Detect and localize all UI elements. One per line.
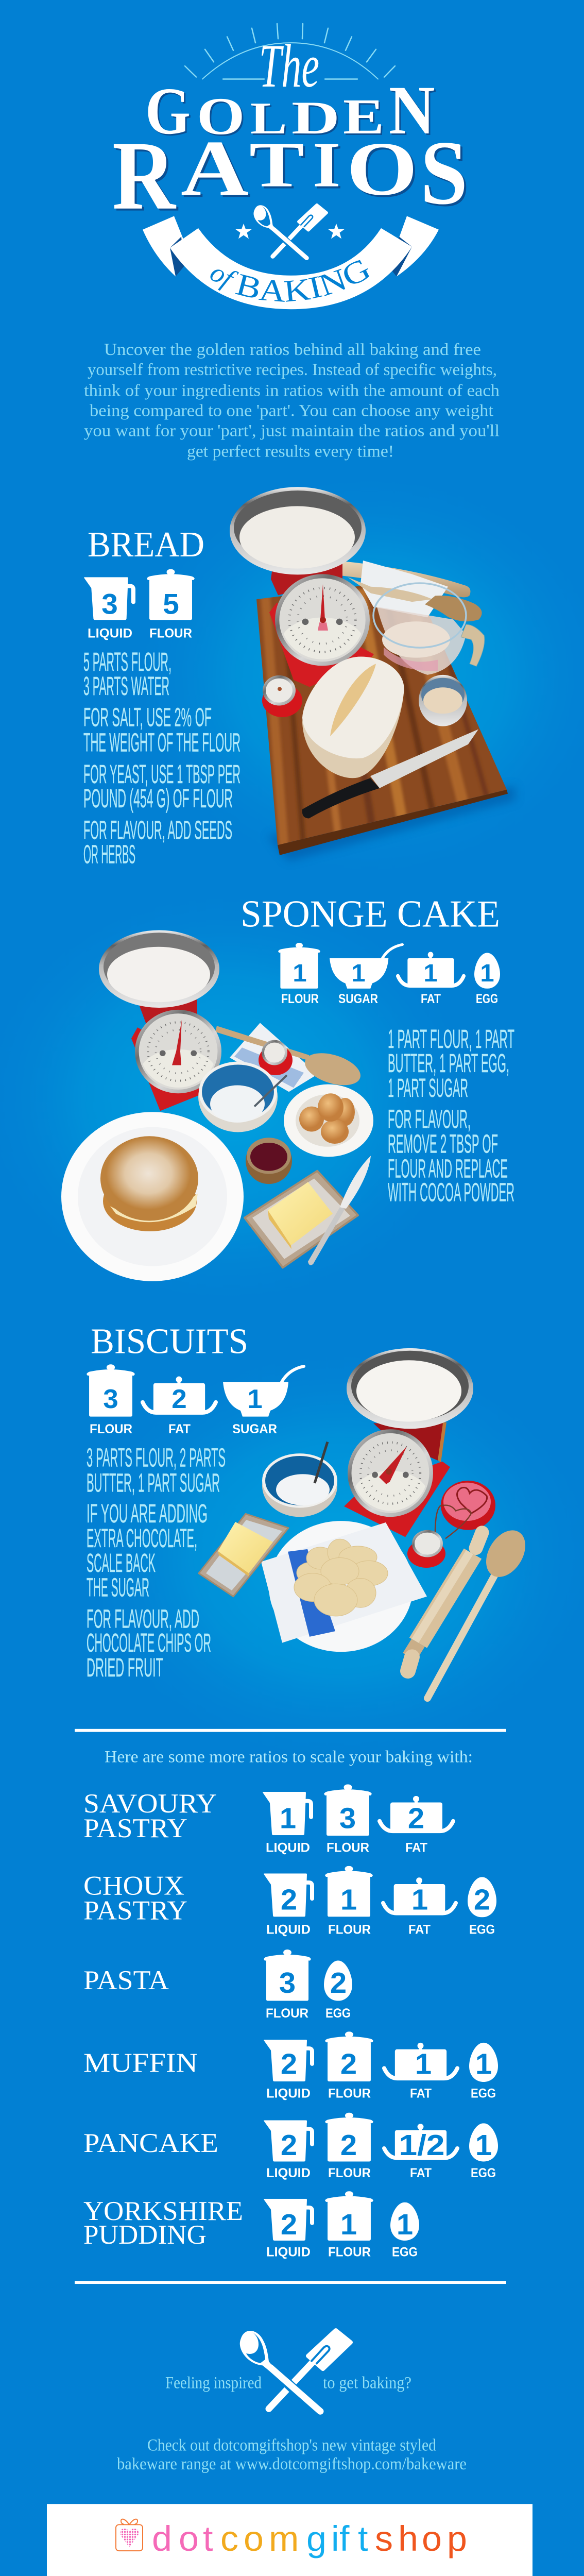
icon: flour 2: FLOUR <box>328 2166 371 2180</box>
heading: PASTRY <box>83 1813 187 1843</box>
knife <box>302 729 478 818</box>
icon: liquid 2: 2 <box>281 2129 297 2162</box>
text: bread notes: OR HERBS <box>83 839 135 869</box>
glass jug <box>373 583 485 675</box>
icon: egg 1: EGG <box>392 2245 418 2259</box>
icon: sugar 1: 1 <box>351 960 366 987</box>
heading: Ratios: T <box>249 129 304 201</box>
icon: flour 2: 2 <box>340 2048 357 2080</box>
divider <box>75 2281 506 2284</box>
icon: fat 1/2 <box>384 2124 457 2180</box>
wooden spoon and towel <box>215 1023 365 1092</box>
butter dish, butter, knife <box>245 1156 371 1267</box>
icon: egg 1 <box>469 2123 498 2180</box>
heading: Ratios: T <box>251 131 306 202</box>
intro text: get perfect results every time! <box>187 443 394 461</box>
loaf <box>302 657 404 778</box>
panel: bread: FOR FLAVOUR, ADD SEEDS <box>83 815 232 844</box>
icon: liquid 3: LIQUID <box>88 626 132 640</box>
photo: bread still life <box>230 487 515 861</box>
logo wordmark: com <box>220 2519 299 2558</box>
banner <box>143 216 439 309</box>
heading: Golden: O <box>198 89 246 147</box>
heading: bread: BREAD <box>88 525 204 565</box>
text: biscuit notes <box>87 1443 226 1682</box>
icon: liquid 1: LIQUID <box>266 1841 310 1855</box>
egg dish <box>284 1084 373 1157</box>
icon: fat 2 <box>380 1796 453 1855</box>
heading: Ratios: I <box>313 129 340 200</box>
icon: fat 1/2: 1/2 <box>399 2129 445 2162</box>
icon: fat 1: 1 <box>423 960 438 987</box>
icon: egg 1: 1 <box>397 2209 413 2241</box>
timer <box>259 1040 293 1075</box>
heading: Golden: D <box>291 92 340 144</box>
icon: fat 2 <box>143 1377 216 1436</box>
divider <box>75 1729 506 1732</box>
heading: sponge cake: SPONGE CAKE <box>241 893 500 935</box>
icon: fat 2: FAT <box>168 1422 191 1436</box>
wooden spoon <box>427 1523 534 1698</box>
icon: spoon and spatula <box>253 205 327 258</box>
text: biscuit notes: SCALE BACK <box>87 1548 156 1578</box>
intro text: being compared to one 'part'. You can choose any weight <box>90 402 493 420</box>
icon: liquid 2: 2 <box>281 2048 297 2080</box>
heading: PASTA <box>83 1965 169 1995</box>
banner text: BAKING <box>235 260 369 302</box>
text: sponge notes: 1 PART SUGAR <box>388 1073 468 1103</box>
heading <box>83 2195 243 2250</box>
heading: Ratios: I <box>315 131 342 202</box>
heading: Golden: G <box>147 76 192 150</box>
icon: liquid 2: LIQUID <box>266 1923 311 1937</box>
icon: liquid 2: LIQUID <box>266 2166 311 2180</box>
text: call to action: Check out dotcomgiftshop's new vintage styled <box>147 2436 436 2455</box>
heading: Ratios: R <box>112 122 176 230</box>
icon: sugar 1 <box>223 1366 304 1436</box>
text: call to action: bakeware range at www.dotcomgiftshop.com/bakeware <box>117 2454 467 2473</box>
icon: flour 2: 2 <box>340 2129 357 2162</box>
icon: flour 3 <box>324 1784 372 1855</box>
icon: liquid 3: 3 <box>101 588 118 620</box>
row: pancake <box>83 2113 498 2180</box>
row: yorkshire pudding <box>83 2191 419 2259</box>
heading: Golden: G <box>145 74 191 148</box>
heading: Golden: N <box>390 74 437 150</box>
heading: Golden: L <box>252 95 288 145</box>
icon: fat 1: 1 <box>415 2048 432 2080</box>
icon: sugar 1: 1 <box>247 1385 263 1414</box>
photo: sponge still life <box>61 930 373 1281</box>
icon: egg 2 <box>468 1877 496 1937</box>
icon: liquid 2: LIQUID <box>266 2245 311 2259</box>
panel: biscuits <box>87 1321 534 1698</box>
banner text <box>205 257 369 302</box>
icon: liquid 2 <box>264 2040 312 2100</box>
heading: PUDDING <box>83 2219 207 2250</box>
scale dial <box>275 574 370 666</box>
icon: flour 3: FLOUR <box>90 1422 132 1436</box>
icon: fat 1: FAT <box>408 1923 431 1937</box>
heading: Golden: E <box>343 89 384 144</box>
icon: flour 5: 5 <box>163 588 179 620</box>
icon: fat 1 <box>398 952 463 1006</box>
panel: biscuits: BUTTER, 1 PART SUGAR <box>87 1468 220 1497</box>
icon: fat 1: FAT <box>421 992 441 1006</box>
icon: liquid 2: LIQUID <box>266 2087 311 2100</box>
plate, towel, biscuits <box>261 1521 427 1652</box>
heading: CHOUX <box>83 1870 184 1901</box>
logo icon: gift <box>116 2519 143 2551</box>
icon: flour 3: 3 <box>339 1802 356 1835</box>
banner text: of <box>205 257 242 295</box>
panel: biscuits: CHOCOLATE CHIPS OR <box>87 1628 211 1657</box>
intro text <box>84 341 500 461</box>
icon: flour 1: 1 <box>293 960 307 987</box>
text: more ratios: Here are some more ratios to scale your baking with: <box>105 1748 473 1766</box>
heading: MUFFIN <box>83 2047 198 2078</box>
text: biscuit notes: IF YOU ARE ADDING <box>87 1499 208 1528</box>
icon: flour 1: FLOUR <box>328 2245 371 2259</box>
text: bread notes: FOR SALT, USE 2% OF <box>83 702 212 732</box>
icon: egg 1: 1 <box>475 2129 492 2162</box>
icon: flour 1 <box>325 2191 373 2259</box>
text: bread notes: 5 PARTS FLOUR, <box>83 647 171 676</box>
icon: fat 1: 1 <box>411 1884 428 1917</box>
row: muffin <box>83 2031 498 2100</box>
text: sponge notes: FOR FLAVOUR, <box>388 1104 471 1134</box>
salt dish <box>419 675 467 726</box>
icon: fat 2: 2 <box>408 1802 424 1835</box>
plate and cake <box>61 1112 244 1281</box>
logo wordmark: gift <box>306 2519 368 2558</box>
heading: SAVOURY <box>83 1788 217 1819</box>
rolling pin, spoon, towel <box>341 561 482 621</box>
panel: bread: POUND (454 G) OF FLOUR <box>83 783 233 813</box>
panel: biscuits: 3 PARTS FLOUR, 2 PARTS <box>87 1443 226 1472</box>
icon: egg 1 <box>474 953 500 1006</box>
icon: flour 5 <box>147 569 195 640</box>
panel: bread: THE WEIGHT OF THE FLOUR <box>83 727 241 757</box>
intro text: Uncover the golden ratios behind all baking and free <box>104 341 481 359</box>
text: bread notes <box>83 647 241 869</box>
icon: stars <box>235 224 345 239</box>
scale <box>344 1348 473 1537</box>
icon: egg 2: 2 <box>474 1884 490 1917</box>
heading: Ratios <box>112 122 470 232</box>
icon: sugar 1: SUGAR <box>338 992 378 1006</box>
icon: flour 1 <box>325 1866 373 1937</box>
text: sponge notes <box>388 1024 514 1207</box>
icon: fat 1: FAT <box>410 2087 432 2100</box>
icon: egg 2: EGG <box>325 2006 351 2021</box>
text: bread notes: 3 PARTS WATER <box>83 671 169 701</box>
icon: egg 1: 1 <box>480 960 494 987</box>
icon: egg 2: EGG <box>469 1923 495 1937</box>
icon: sugar 1: SUGAR <box>232 1422 277 1436</box>
photo: biscuits still life <box>199 1348 534 1698</box>
icon: fat 1 <box>384 2043 457 2100</box>
heading: Ratios: O <box>347 126 418 211</box>
sun rays and arc <box>185 24 395 79</box>
heading: Ratios: S <box>420 123 468 224</box>
panel: sponge cake <box>61 893 514 1281</box>
icon: flour 3: 3 <box>279 1967 296 1999</box>
icon: flour 2 <box>325 2113 373 2180</box>
icon: flour 5: FLOUR <box>149 626 192 640</box>
text: biscuit notes: EXTRA CHOCOLATE, <box>87 1523 197 1553</box>
heading: YORKSHIRE <box>83 2195 243 2226</box>
heading: Ratios: A <box>181 124 249 212</box>
text: biscuit notes: THE SUGAR <box>87 1572 149 1602</box>
panel: bread <box>83 487 515 869</box>
heading <box>83 1870 187 1925</box>
row: pasta <box>83 1950 352 2021</box>
icon: liquid 2 <box>264 1873 312 1937</box>
logo wordmark: shop <box>375 2519 467 2558</box>
timer <box>262 675 302 717</box>
heading: Ratios: A <box>183 126 251 214</box>
scale base <box>269 603 374 687</box>
icon: egg 1: EGG <box>471 2087 496 2100</box>
icon: liquid 1 <box>263 1792 311 1855</box>
footer panel <box>47 2504 533 2576</box>
icon: egg 2 <box>324 1960 352 2021</box>
sugar bowl <box>198 1062 287 1132</box>
heading: Ratios: R <box>114 124 178 232</box>
icon: fat 1 <box>383 1877 456 1937</box>
title logo <box>112 23 470 309</box>
heading <box>83 1788 217 1843</box>
sugar bowl <box>262 1442 337 1517</box>
icon: liquid 1: 1 <box>280 1802 296 1835</box>
timer <box>407 1530 445 1568</box>
intro text: you want for your 'part', just maintain the ratios and you'll <box>84 422 500 440</box>
icon: flour 3: FLOUR <box>266 2006 308 2021</box>
heading: Golden: E <box>345 90 386 146</box>
icon: flour 1: 1 <box>340 1884 357 1917</box>
logo wordmark: dot <box>152 2519 213 2558</box>
icon: liquid 2: 2 <box>281 2209 297 2241</box>
heading: Golden: N <box>389 72 435 149</box>
heading: Golden: L <box>250 94 287 144</box>
icon: flour 1 <box>278 943 320 1006</box>
heading: Ratios: S <box>422 125 470 226</box>
icon: liquid 2: 2 <box>281 1884 297 1917</box>
icon: spoon and spatula <box>240 2330 351 2411</box>
scale <box>99 930 221 1111</box>
row: choux pastry <box>83 1866 496 1937</box>
icon: flour 1: FLOUR <box>281 992 319 1006</box>
icon: flour 1: FLOUR <box>328 1923 371 1937</box>
heading: PASTRY <box>83 1895 187 1925</box>
icon: liquid 3 <box>84 577 133 640</box>
text: call to action <box>117 2436 467 2473</box>
row: savoury pastry <box>83 1784 453 1855</box>
heart cutters <box>435 1481 495 1538</box>
icon: egg 1 <box>390 2202 419 2259</box>
heading: The: The <box>259 32 319 100</box>
icon: flour 1: 1 <box>340 2209 357 2241</box>
icon: flour 2: FLOUR <box>328 2087 371 2100</box>
icon: liquid 2 <box>264 2199 312 2259</box>
intro text: yourself from restrictive recipes. Instead of specific weights, <box>88 361 497 379</box>
text: feeling inspired: Feeling inspired <box>165 2374 262 2392</box>
intro text: think of your ingredients in ratios with the amount of each <box>84 382 500 400</box>
icon: egg 1: 1 <box>475 2048 492 2080</box>
text: feeling inspired: to get baking? <box>323 2374 411 2392</box>
heading: Golden <box>145 72 437 150</box>
jam jar <box>246 1138 292 1184</box>
icon: egg 1 <box>469 2043 498 2100</box>
icon: fat 2: FAT <box>405 1841 427 1855</box>
icon: flour 3 <box>87 1364 135 1436</box>
text: biscuit notes: DRIED FRUIT <box>87 1653 163 1682</box>
scale pan with flour <box>230 487 366 595</box>
butter dish <box>199 1514 288 1597</box>
icon: flour 3 <box>264 1950 311 2021</box>
heading: Golden: D <box>293 94 341 145</box>
icon: flour 3: FLOUR <box>327 1841 369 1855</box>
heading: biscuits: BISCUITS <box>91 1321 248 1361</box>
text: feeling inspired <box>165 2374 411 2392</box>
icon: liquid 2 <box>264 2120 312 2180</box>
heading: Golden: O <box>197 88 245 146</box>
panel: bread: FOR YEAST, USE 1 TBSP PER <box>83 759 241 789</box>
icon: fat 1/2: FAT <box>410 2166 432 2180</box>
icon: egg 1: EGG <box>476 992 498 1006</box>
icon: sugar 1 <box>330 944 402 1006</box>
icon: fat 2: 2 <box>171 1385 187 1414</box>
board <box>256 579 515 861</box>
icon: flour 2 <box>325 2031 373 2100</box>
rolling pin <box>408 1533 482 1671</box>
logo wordmark <box>152 2519 467 2558</box>
text: biscuit notes: FOR FLAVOUR, ADD <box>87 1604 199 1633</box>
heading: PANCAKE <box>83 2127 218 2158</box>
heading: Ratios: O <box>349 128 420 213</box>
icon: egg 2: 2 <box>330 1967 347 1999</box>
icon: egg 1: EGG <box>471 2166 496 2180</box>
icon: flour 3: 3 <box>103 1385 118 1414</box>
